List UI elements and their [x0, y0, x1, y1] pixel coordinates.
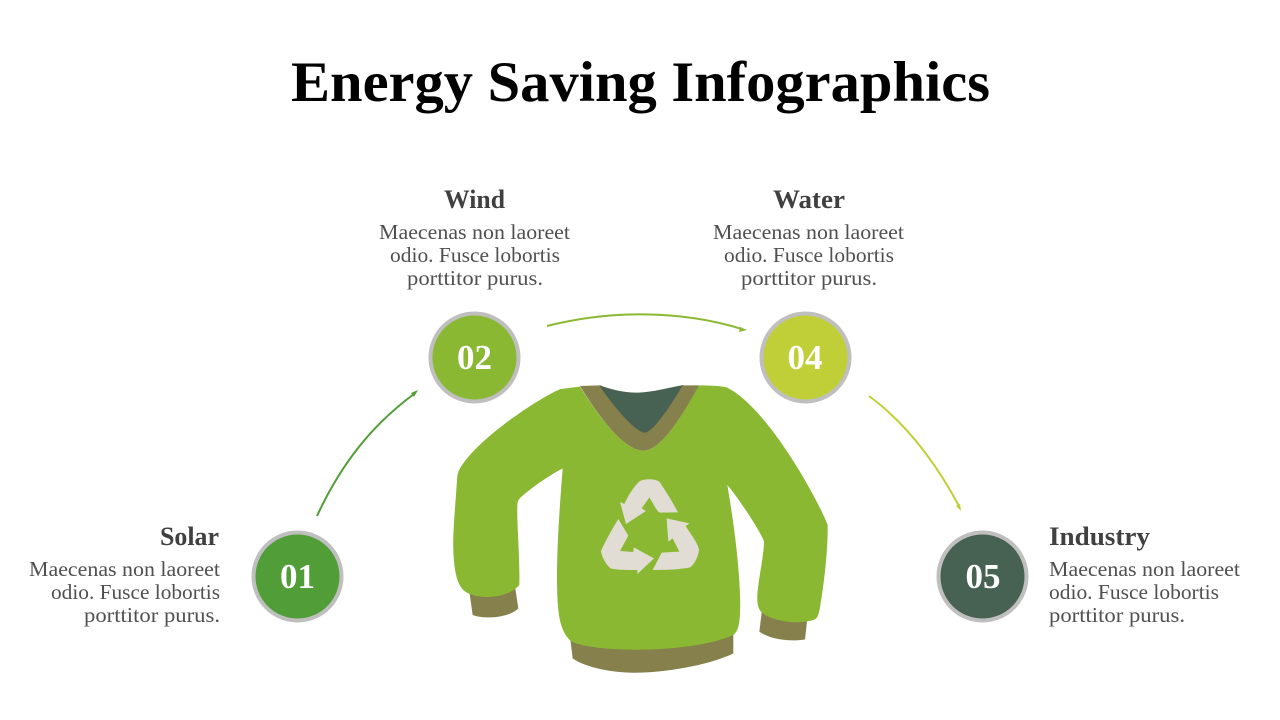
sweater right cuff — [759, 610, 807, 640]
arrow: 02 to 04 — [547, 314, 747, 332]
text block: Solar — [29, 522, 220, 627]
text block: Solar: odio. Fusce lobortis — [51, 580, 220, 604]
text block: Wind: odio. Fusce lobortis — [390, 243, 560, 267]
text block: Wind — [379, 185, 570, 290]
step 04 badge — [762, 314, 850, 402]
text block: Industry — [1049, 522, 1240, 627]
sweater neck inner — [599, 385, 683, 447]
text block: Industry: Maecenas non laoreet — [1049, 557, 1240, 581]
icon: sweater — [453, 385, 828, 673]
text block: Water — [713, 185, 904, 290]
text block: Water: Maecenas non laoreet — [713, 220, 904, 244]
arrow: 04 to 05 — [869, 396, 961, 511]
text block: Wind: Wind — [444, 185, 506, 214]
step 05 badge — [938, 532, 1026, 620]
step 04 badge: 04 — [788, 338, 822, 377]
text block: Wind: porttitor purus. — [407, 266, 543, 290]
sweater collar — [580, 385, 699, 451]
text block: Solar: Solar — [160, 522, 219, 551]
step 02 badge — [430, 314, 518, 402]
recycle arrow left — [601, 519, 654, 574]
arrow: 01 to 02 — [317, 390, 418, 516]
recycle arrow top — [620, 479, 678, 524]
text block: Water: odio. Fusce lobortis — [724, 243, 894, 267]
sweater hem — [570, 630, 733, 673]
recycle arrow right — [653, 518, 699, 570]
text block: Solar: Maecenas non laoreet — [29, 557, 220, 581]
sweater left cuff — [469, 587, 518, 617]
step 05 badge: 05 — [966, 557, 1000, 596]
text block: Industry: porttitor purus. — [1049, 603, 1185, 627]
title: Energy Saving Infographics — [291, 51, 990, 114]
text block: Solar: porttitor purus. — [84, 603, 220, 627]
step 02 badge: 02 — [457, 338, 492, 377]
sweater body — [453, 385, 828, 650]
text block: Water: porttitor purus. — [741, 266, 877, 290]
text block: Industry: Industry — [1049, 522, 1150, 551]
text block: Industry: odio. Fusce lobortis — [1049, 580, 1219, 604]
text block: Wind: Maecenas non laoreet — [379, 220, 570, 244]
icon: recycle symbol — [601, 479, 699, 574]
text block: Water: Water — [773, 185, 845, 214]
step 01 badge: 01 — [280, 557, 315, 596]
step 01 badge — [254, 532, 342, 620]
